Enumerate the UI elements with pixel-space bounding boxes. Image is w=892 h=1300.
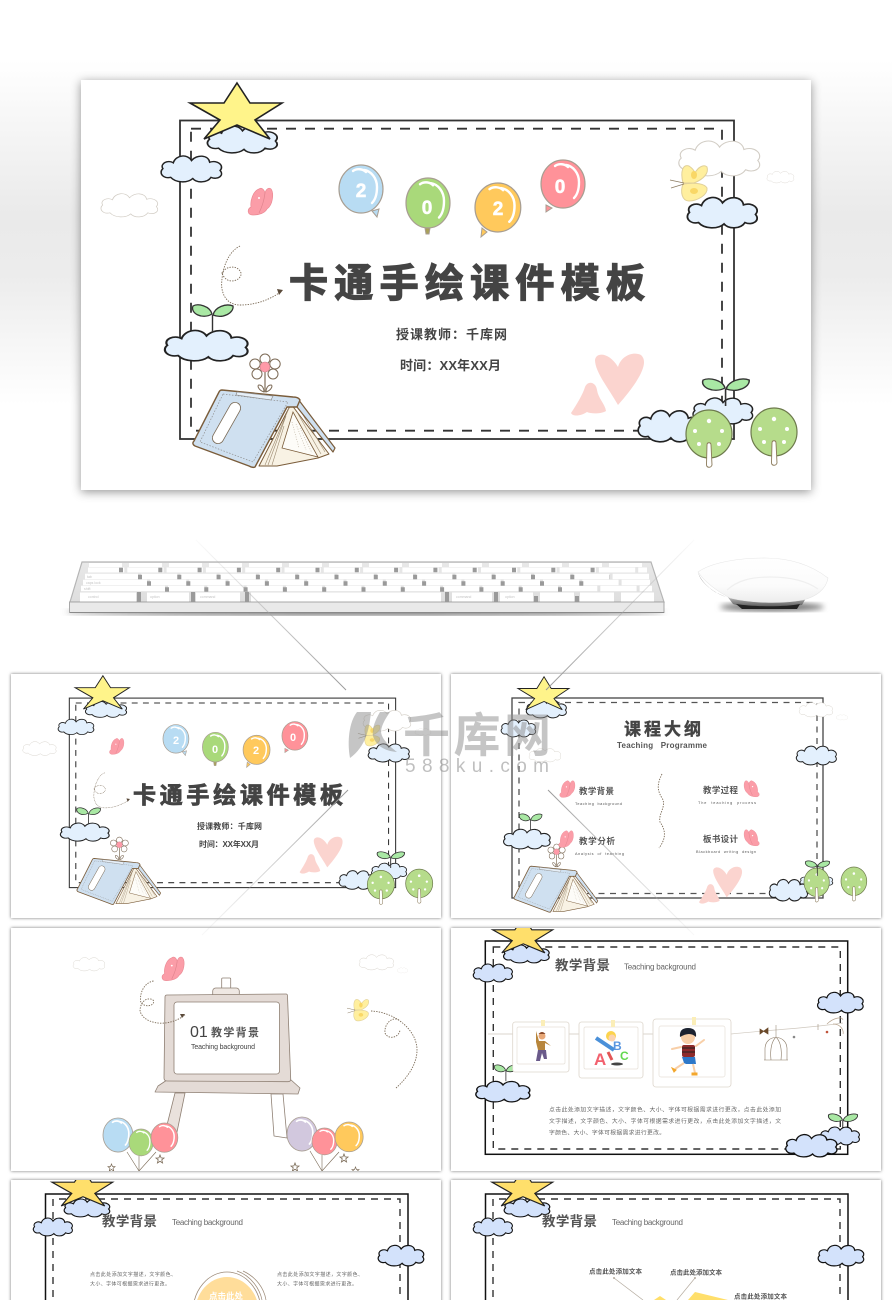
keyboard: control xyxy=(88,595,99,599)
outline item: 板书设计: Blackboard writing design xyxy=(696,850,756,854)
balloon numerals 2020 xyxy=(356,177,565,220)
photo frame 3 xyxy=(653,1017,731,1087)
outline item: 教学背景: 教学背景 xyxy=(579,786,614,796)
outline item: 教学过程: 教学过程 xyxy=(703,785,738,795)
photo frame 1 xyxy=(513,1020,569,1072)
outline item: 教学背景 xyxy=(560,781,622,806)
diagonal light streaks xyxy=(196,540,694,935)
thumbnail 5 right text: 大小、字体可根据需求进行更改。 xyxy=(277,1280,357,1288)
thumbnail 6 labels xyxy=(589,1266,788,1300)
thumbnail 1 title: 卡通手绘课件模板 xyxy=(133,782,343,808)
thumbnail 2 subtitle: Teaching Programme xyxy=(617,741,708,750)
section heading: 教学背景 xyxy=(211,1025,259,1039)
left balloon bunch xyxy=(103,1118,178,1171)
panel: thumbnail 3 section divider xyxy=(11,928,441,1171)
panel: thumbnail 6 xyxy=(451,1180,881,1300)
thumbnail 4 frame xyxy=(485,941,848,1154)
photo frame 2 xyxy=(579,1020,643,1078)
thumbnail 5 left text: 大小、字体可根据需求进行更改。 xyxy=(90,1280,170,1288)
thumbnail 2 centre wavy divider xyxy=(658,774,664,848)
thumbnail 6 labels: 点击此处添加文本 xyxy=(670,1268,722,1276)
thumbnail 5 heading: 教学背景 xyxy=(102,1213,157,1229)
thumbnail 1 balloon numerals: 0 xyxy=(290,732,296,744)
keyboard: shift xyxy=(84,587,90,591)
thumbnail 1 balloon numerals: 2 xyxy=(173,735,179,747)
thumbnail 3 butterflies and dotted paths xyxy=(140,957,417,1088)
thumbnail 6 heading: 教学背景 xyxy=(542,1213,597,1229)
mouse xyxy=(698,558,828,612)
right balloon bunch xyxy=(287,1117,363,1174)
panel: hero slide xyxy=(81,80,811,490)
thumbnail 5 circle callout xyxy=(193,1271,266,1300)
keyboard: caps lock xyxy=(86,581,101,585)
outline item: 教学过程 xyxy=(698,781,759,805)
panel: thumbnail 5 xyxy=(11,1180,441,1300)
balloon numerals 2020: 2 xyxy=(356,181,366,202)
outline item: 板书设计 xyxy=(696,830,759,854)
photo frame 2: B xyxy=(613,1039,622,1053)
outline item: 教学分析: 教学分析 xyxy=(579,836,615,846)
balloon numerals 2020: 0 xyxy=(555,177,565,198)
hero slide illustration: frame, star, clouds, balloons, book xyxy=(101,83,797,467)
thumbnail 5 right text: 点击此处添加文字描述，文字颜色、 xyxy=(277,1271,363,1278)
thumbnail 5 right text xyxy=(277,1271,363,1288)
panel: thumbnail 4 background slide xyxy=(451,928,881,1171)
balloon numerals 2020: 0 xyxy=(422,198,432,219)
photo frame 2: A xyxy=(594,1050,606,1069)
thumbnail 1 balloon numerals: 0 xyxy=(212,744,218,756)
thumbnail 2 decorations xyxy=(501,677,867,912)
thumbnail 1 illustration xyxy=(23,676,433,905)
panel: thumbnail 1 cover xyxy=(11,674,441,918)
keyboard: option xyxy=(505,595,515,599)
easel board xyxy=(155,978,300,1138)
thumbnail 6 leader lines and star burst xyxy=(613,1277,728,1300)
watermark xyxy=(349,709,551,777)
outline item: 教学背景: Teaching background xyxy=(575,802,622,806)
outline item: 教学过程: The teaching process xyxy=(698,801,756,805)
keyboard: command xyxy=(456,595,471,599)
thumbnail 5 decorations xyxy=(32,1180,424,1266)
photo frame 2: C xyxy=(620,1049,629,1063)
thumbnail 4 subheading: Teaching background xyxy=(624,962,696,972)
thumbnail 1 balloon numerals xyxy=(173,732,296,757)
thumbnail 4 body text: 文字描述，文字颜色、大小、字体可根据需求进行更改，点击此处添加文字描述，文 xyxy=(549,1117,781,1125)
thumbnail 5 left text: 点击此处添加文字描述，文字颜色、 xyxy=(90,1271,176,1278)
watermark: 588ku.com xyxy=(405,756,549,777)
outline item: 教学分析: Analysis of teaching xyxy=(575,852,624,856)
keyboard xyxy=(65,562,665,615)
time line: 时间：XX年XX月 xyxy=(400,358,501,373)
keyboard: command xyxy=(200,595,215,599)
clothesline with cage xyxy=(488,1018,843,1060)
keyboard: option xyxy=(150,595,160,599)
outline item: 教学分析 xyxy=(559,831,624,856)
panel: thumbnail 2 outline slide xyxy=(451,674,881,918)
thumbnail 4 decorations xyxy=(473,917,863,1157)
thumbnail 3 white clouds xyxy=(73,955,408,973)
outline item: 板书设计: 板书设计 xyxy=(703,834,738,844)
thumbnail 5 subheading: Teaching background xyxy=(172,1218,243,1227)
thumbnail 1 balloon numerals: 2 xyxy=(253,745,259,757)
thumbnail 2 title: 课程大纲 xyxy=(624,719,701,739)
thumbnail 4 body text: 点击此处添加文字描述，文字颜色、大小、字体可根据需求进行更改，点击此处添加 xyxy=(549,1106,781,1114)
background gradient band xyxy=(0,60,892,405)
thumbnail 4 body text: 字颜色、大小、字体可根据需求进行更改。 xyxy=(549,1128,665,1136)
thumbnail 6 labels: 点击此处添加文本 xyxy=(589,1266,642,1276)
keyboard: tab xyxy=(87,575,92,579)
thumbnail 1 time line: 时间：XX年XX月 xyxy=(199,839,259,849)
thumbnail 4 body text xyxy=(549,1106,781,1136)
thumbnail 1 teacher line: 授课教师：千库网 xyxy=(197,821,262,831)
section number 01: 01 xyxy=(190,1024,208,1041)
thumbnail 5 left text xyxy=(90,1271,176,1288)
thumbnail 6 subheading: Teaching background xyxy=(612,1218,683,1227)
thumbnail 6 decorations xyxy=(472,1180,864,1266)
teacher line: 授课教师：千库网 xyxy=(396,327,507,342)
watermark: 千库网 xyxy=(403,709,551,762)
thumbnail 4 heading: 教学背景 xyxy=(555,957,610,973)
section subtitle: Teaching background xyxy=(191,1044,255,1051)
thumbnail 2 frame xyxy=(512,698,823,898)
thumbnail 6 frame xyxy=(486,1194,848,1300)
thumbnail 5 frame xyxy=(46,1194,408,1300)
balloon numerals 2020: 2 xyxy=(493,199,503,220)
title: 卡通手绘课件模板 xyxy=(289,263,645,306)
